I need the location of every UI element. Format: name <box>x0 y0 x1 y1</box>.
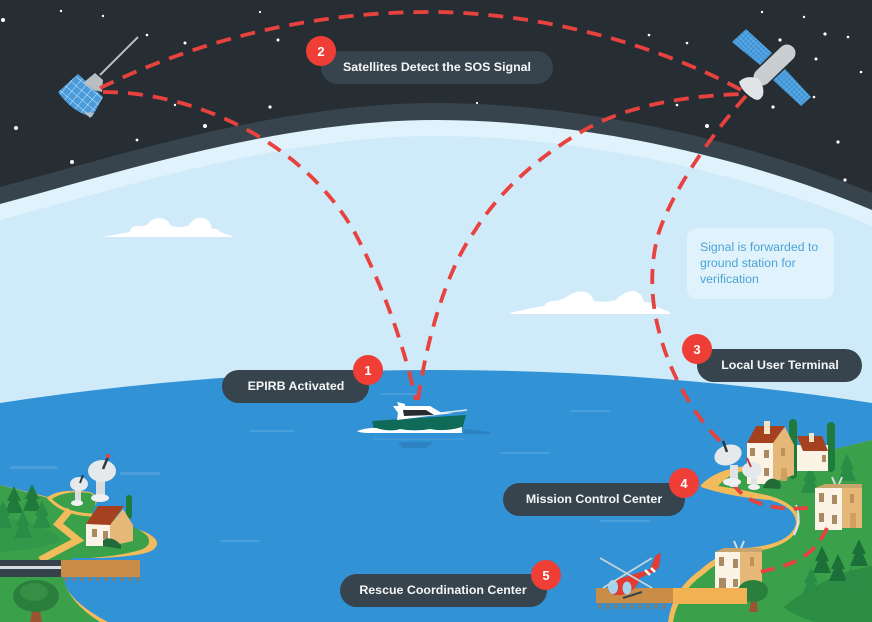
cloud left <box>103 218 232 237</box>
label 2: Satellites Detect the SOS Signal: 2 <box>317 44 325 59</box>
cube house upper <box>815 477 862 530</box>
label 3: Local User Terminal <box>682 334 862 382</box>
label 2: Satellites Detect the SOS Signal: Satellites Detect the SOS Signal <box>343 60 531 74</box>
label 3: Local User Terminal: Local User Terminal <box>721 358 839 372</box>
label 5: Rescue Coordination Center: 5 <box>542 568 550 583</box>
water streaks <box>10 393 650 542</box>
road <box>0 560 61 577</box>
callout: signal forwarded: Signal is forwarded to <box>700 240 818 254</box>
callout: signal forwarded: verification <box>700 272 759 286</box>
right satellite <box>732 29 811 106</box>
label 4: Mission Control Center: Mission Control Center <box>526 492 662 506</box>
signal path: dish to mission control <box>733 483 815 509</box>
label 1: EPIRB Activated: EPIRB Activated <box>248 379 344 393</box>
front house <box>747 421 794 489</box>
boat <box>357 402 490 434</box>
left satellite <box>58 37 138 118</box>
sky <box>0 136 872 622</box>
helipad pier <box>596 588 673 609</box>
label 1: EPIRB Activated: 1 <box>364 363 372 378</box>
left large dish <box>88 454 116 502</box>
signal path: satellites arc <box>100 12 745 92</box>
callout: signal forwarded: ground station for <box>700 256 796 270</box>
signal path: boat to left satellite <box>103 92 416 400</box>
ocean <box>0 370 872 622</box>
label 4: Mission Control Center: 4 <box>680 476 688 491</box>
right pine trees <box>789 419 868 595</box>
stars <box>1 10 862 182</box>
label 5: Rescue Coordination Center: Rescue Coordination Center <box>359 583 527 597</box>
tree by dock <box>738 580 768 612</box>
left pine trees <box>0 484 132 538</box>
signal path: right satellite to dish <box>652 96 746 446</box>
right dish small <box>742 458 762 490</box>
cloud right <box>510 291 670 314</box>
right shore <box>668 440 872 622</box>
boat reflection <box>374 438 464 448</box>
helicopter <box>600 553 661 598</box>
dock path <box>673 588 747 604</box>
left house <box>86 506 133 549</box>
left pier <box>61 560 140 581</box>
label 3: Local User Terminal: 3 <box>693 342 701 357</box>
left tree <box>13 580 59 622</box>
left shore <box>0 485 157 622</box>
label 5: Rescue Coordination Center <box>340 560 561 607</box>
label 1: EPIRB Activated <box>222 355 383 403</box>
label 4: Mission Control Center <box>503 468 699 516</box>
label 2: Satellites Detect the SOS Signal <box>306 36 553 84</box>
right dish large <box>711 441 745 487</box>
signal path: mission control to rescue <box>760 528 827 572</box>
signal path: boat to right satellite <box>418 94 746 400</box>
cube house lower <box>715 541 762 593</box>
back house <box>797 433 828 471</box>
left small dish <box>70 475 88 506</box>
callout: signal forwarded <box>687 228 834 299</box>
